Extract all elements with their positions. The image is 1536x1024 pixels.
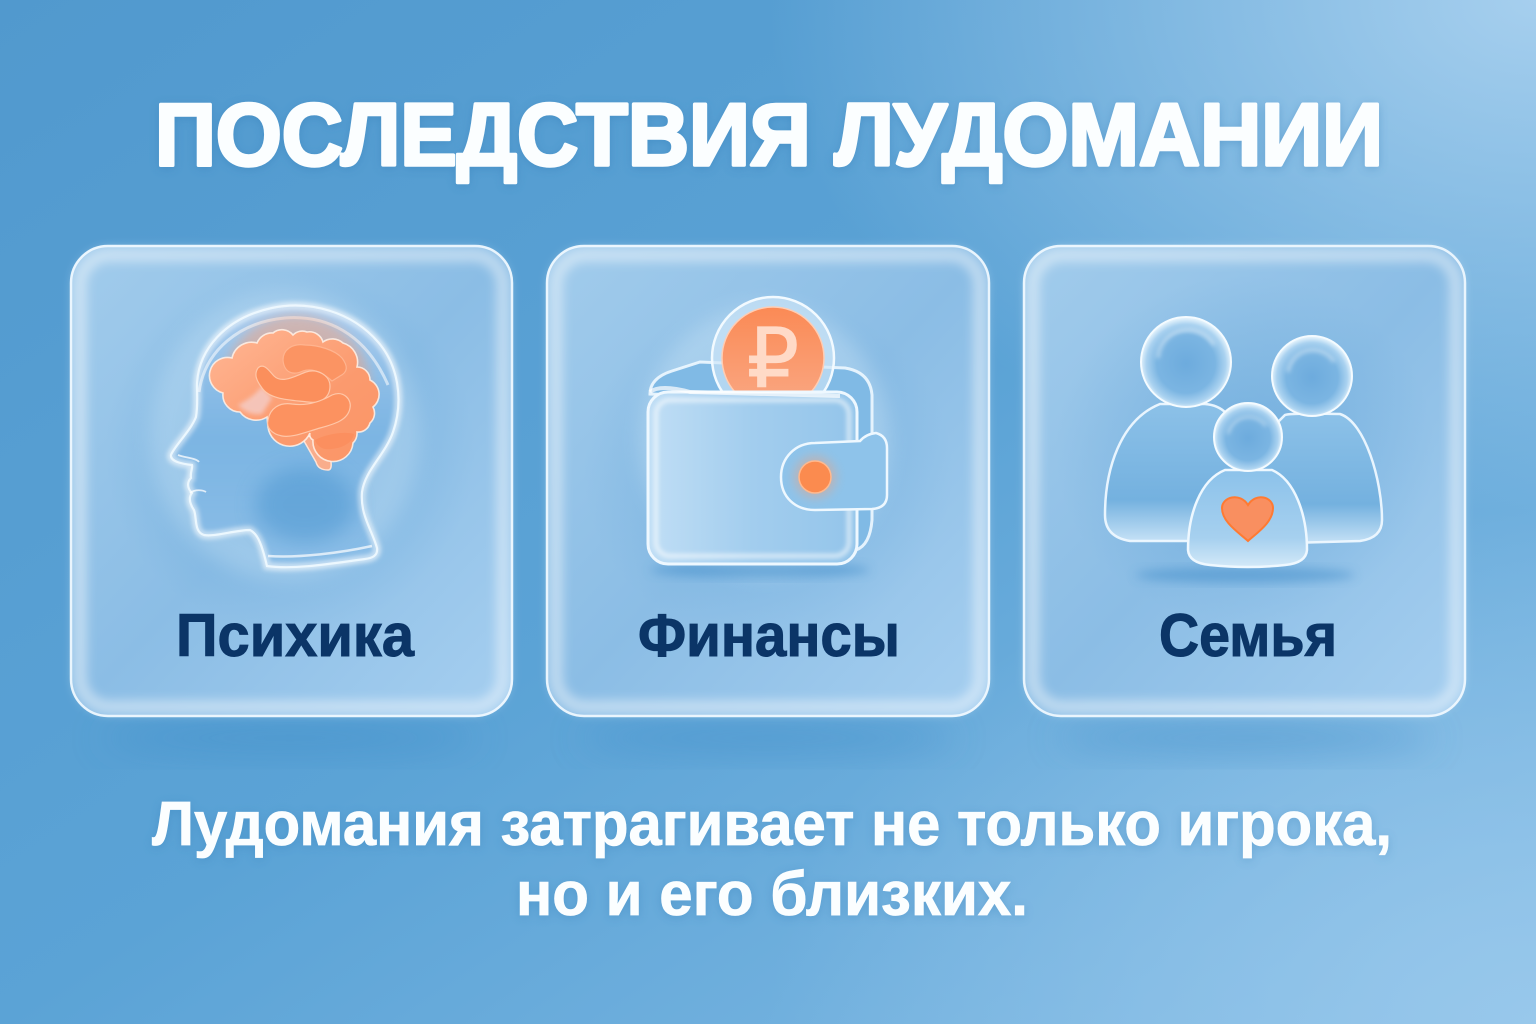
right parent [1260, 336, 1382, 543]
label: семья: Семья [1159, 602, 1337, 669]
caption: но и его близких. [516, 860, 1028, 929]
wallet back [650, 362, 872, 550]
label: психика: Психика [176, 602, 415, 669]
label: финансы: Финансы [638, 602, 900, 669]
icon: glass head with brain [150, 290, 420, 580]
panel: финансы [546, 245, 990, 750]
caption: Лудомания затрагивает не только игрока, [152, 790, 1392, 859]
caption: Лудомания затрагивает не только игрока, [152, 792, 1392, 861]
panel: психика [70, 245, 513, 750]
button [794, 456, 836, 498]
heart [1222, 497, 1273, 541]
left parent [1105, 317, 1240, 541]
child [1188, 403, 1307, 567]
wallet front [648, 392, 857, 564]
coin [710, 296, 836, 390]
brain [209, 315, 379, 470]
title: ПОСЛЕДСТВИЯ ЛУДОМАНИИ [155, 87, 1383, 186]
title: ПОСЛЕДСТВИЯ ЛУДОМАНИИ [155, 85, 1383, 184]
icon: glass family with heart [1105, 317, 1382, 583]
strap [781, 433, 887, 510]
panel: семья [1023, 245, 1466, 750]
coin: ₽ [747, 312, 799, 407]
caption [152, 790, 1392, 931]
icon: glass wallet with coin [640, 297, 890, 578]
caption: но и его близких. [516, 862, 1028, 931]
